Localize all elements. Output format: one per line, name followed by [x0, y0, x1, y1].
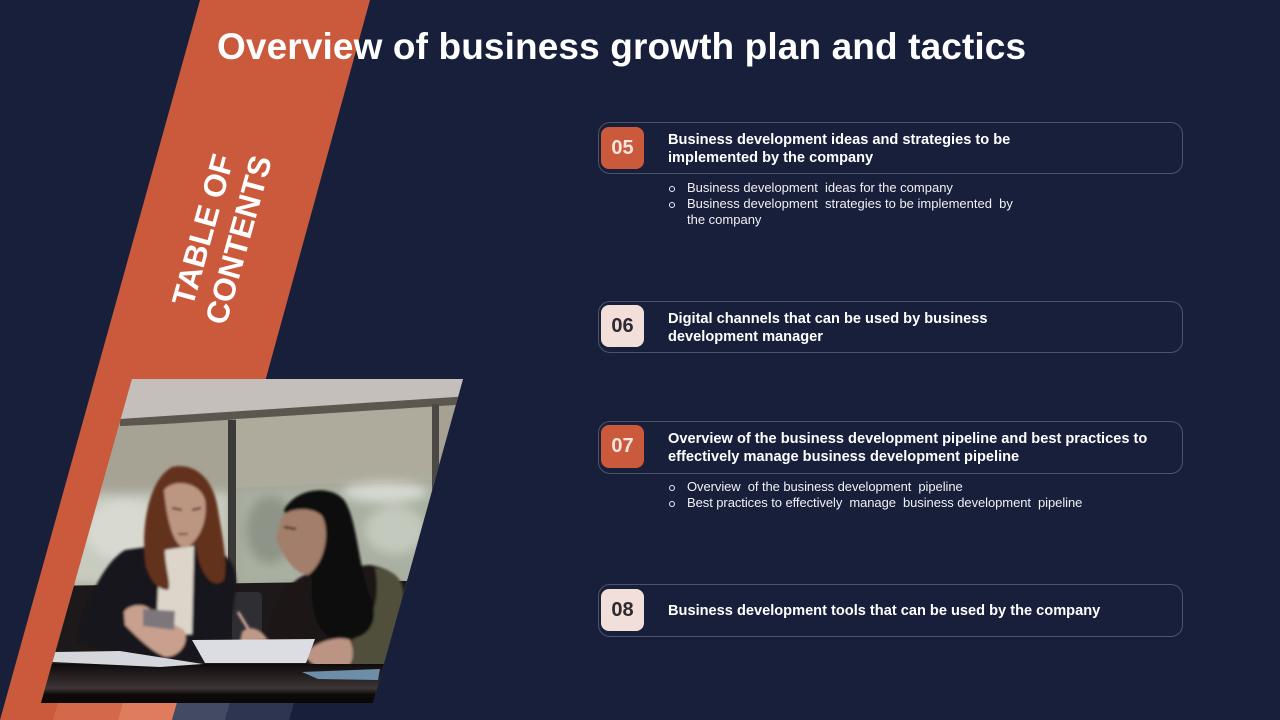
badge 07 [601, 425, 644, 468]
badge 06: 06 [611, 315, 634, 337]
badge 06 [601, 305, 644, 347]
heading 07: effectively manage business development pipeline [668, 449, 1019, 465]
heading 05 [668, 132, 1010, 166]
heading 05: Business development ideas and strategies to be [668, 132, 1010, 148]
orange slanted band [0, 0, 370, 720]
badge 05: 05 [611, 137, 634, 159]
badge 08: 08 [611, 599, 634, 621]
heading 05: implemented by the company [668, 150, 873, 166]
item 07 bullets: Best practices to effectively manage business development pipeline [687, 495, 1082, 510]
section label: table of contents: TABLE OF [165, 150, 241, 309]
woman left [77, 466, 236, 660]
woman right [238, 490, 404, 670]
heading 08: Business development tools that can be used by the company [668, 603, 1100, 619]
photo: two businesswomen reviewing documents at a table [30, 379, 470, 709]
papers on table [52, 651, 203, 667]
badge 08 [601, 589, 644, 631]
dark wall behind table [41, 580, 407, 703]
heading 06: development manager [668, 329, 823, 345]
heading 06 [668, 311, 988, 345]
item 07 bullets: Overview of the business development pipeline [687, 479, 963, 494]
greenery through window [60, 480, 445, 585]
item 05 bullets: Business development ideas for the company [687, 180, 953, 195]
item 07 header [598, 421, 1183, 474]
title: Overview of business growth plan and tactics [217, 26, 1026, 67]
ceiling [120, 379, 470, 423]
item 05 bullets: Business development strategies to be implemented by [687, 196, 1013, 211]
badge 05 [601, 127, 644, 169]
item 06 header [598, 301, 1183, 353]
decorative slanted band and photo [0, 0, 463, 720]
section label: table of contents: CONTENTS [198, 152, 279, 328]
window blinds [100, 424, 172, 492]
item 05 bullets [669, 180, 1013, 227]
window mullions [228, 420, 236, 585]
item 05 header [598, 122, 1183, 174]
item 05 bullets: the company [687, 212, 761, 227]
badge 07: 07 [611, 435, 634, 457]
heading 07 [668, 431, 1147, 465]
table [30, 664, 390, 703]
item 08 header [598, 584, 1183, 637]
heading 06: Digital channels that can be used by business [668, 311, 988, 327]
bottom colour strips [53, 703, 294, 720]
item 07 bullets [669, 479, 1082, 510]
heading 07: Overview of the business development pipeline and best practices to [668, 431, 1147, 447]
